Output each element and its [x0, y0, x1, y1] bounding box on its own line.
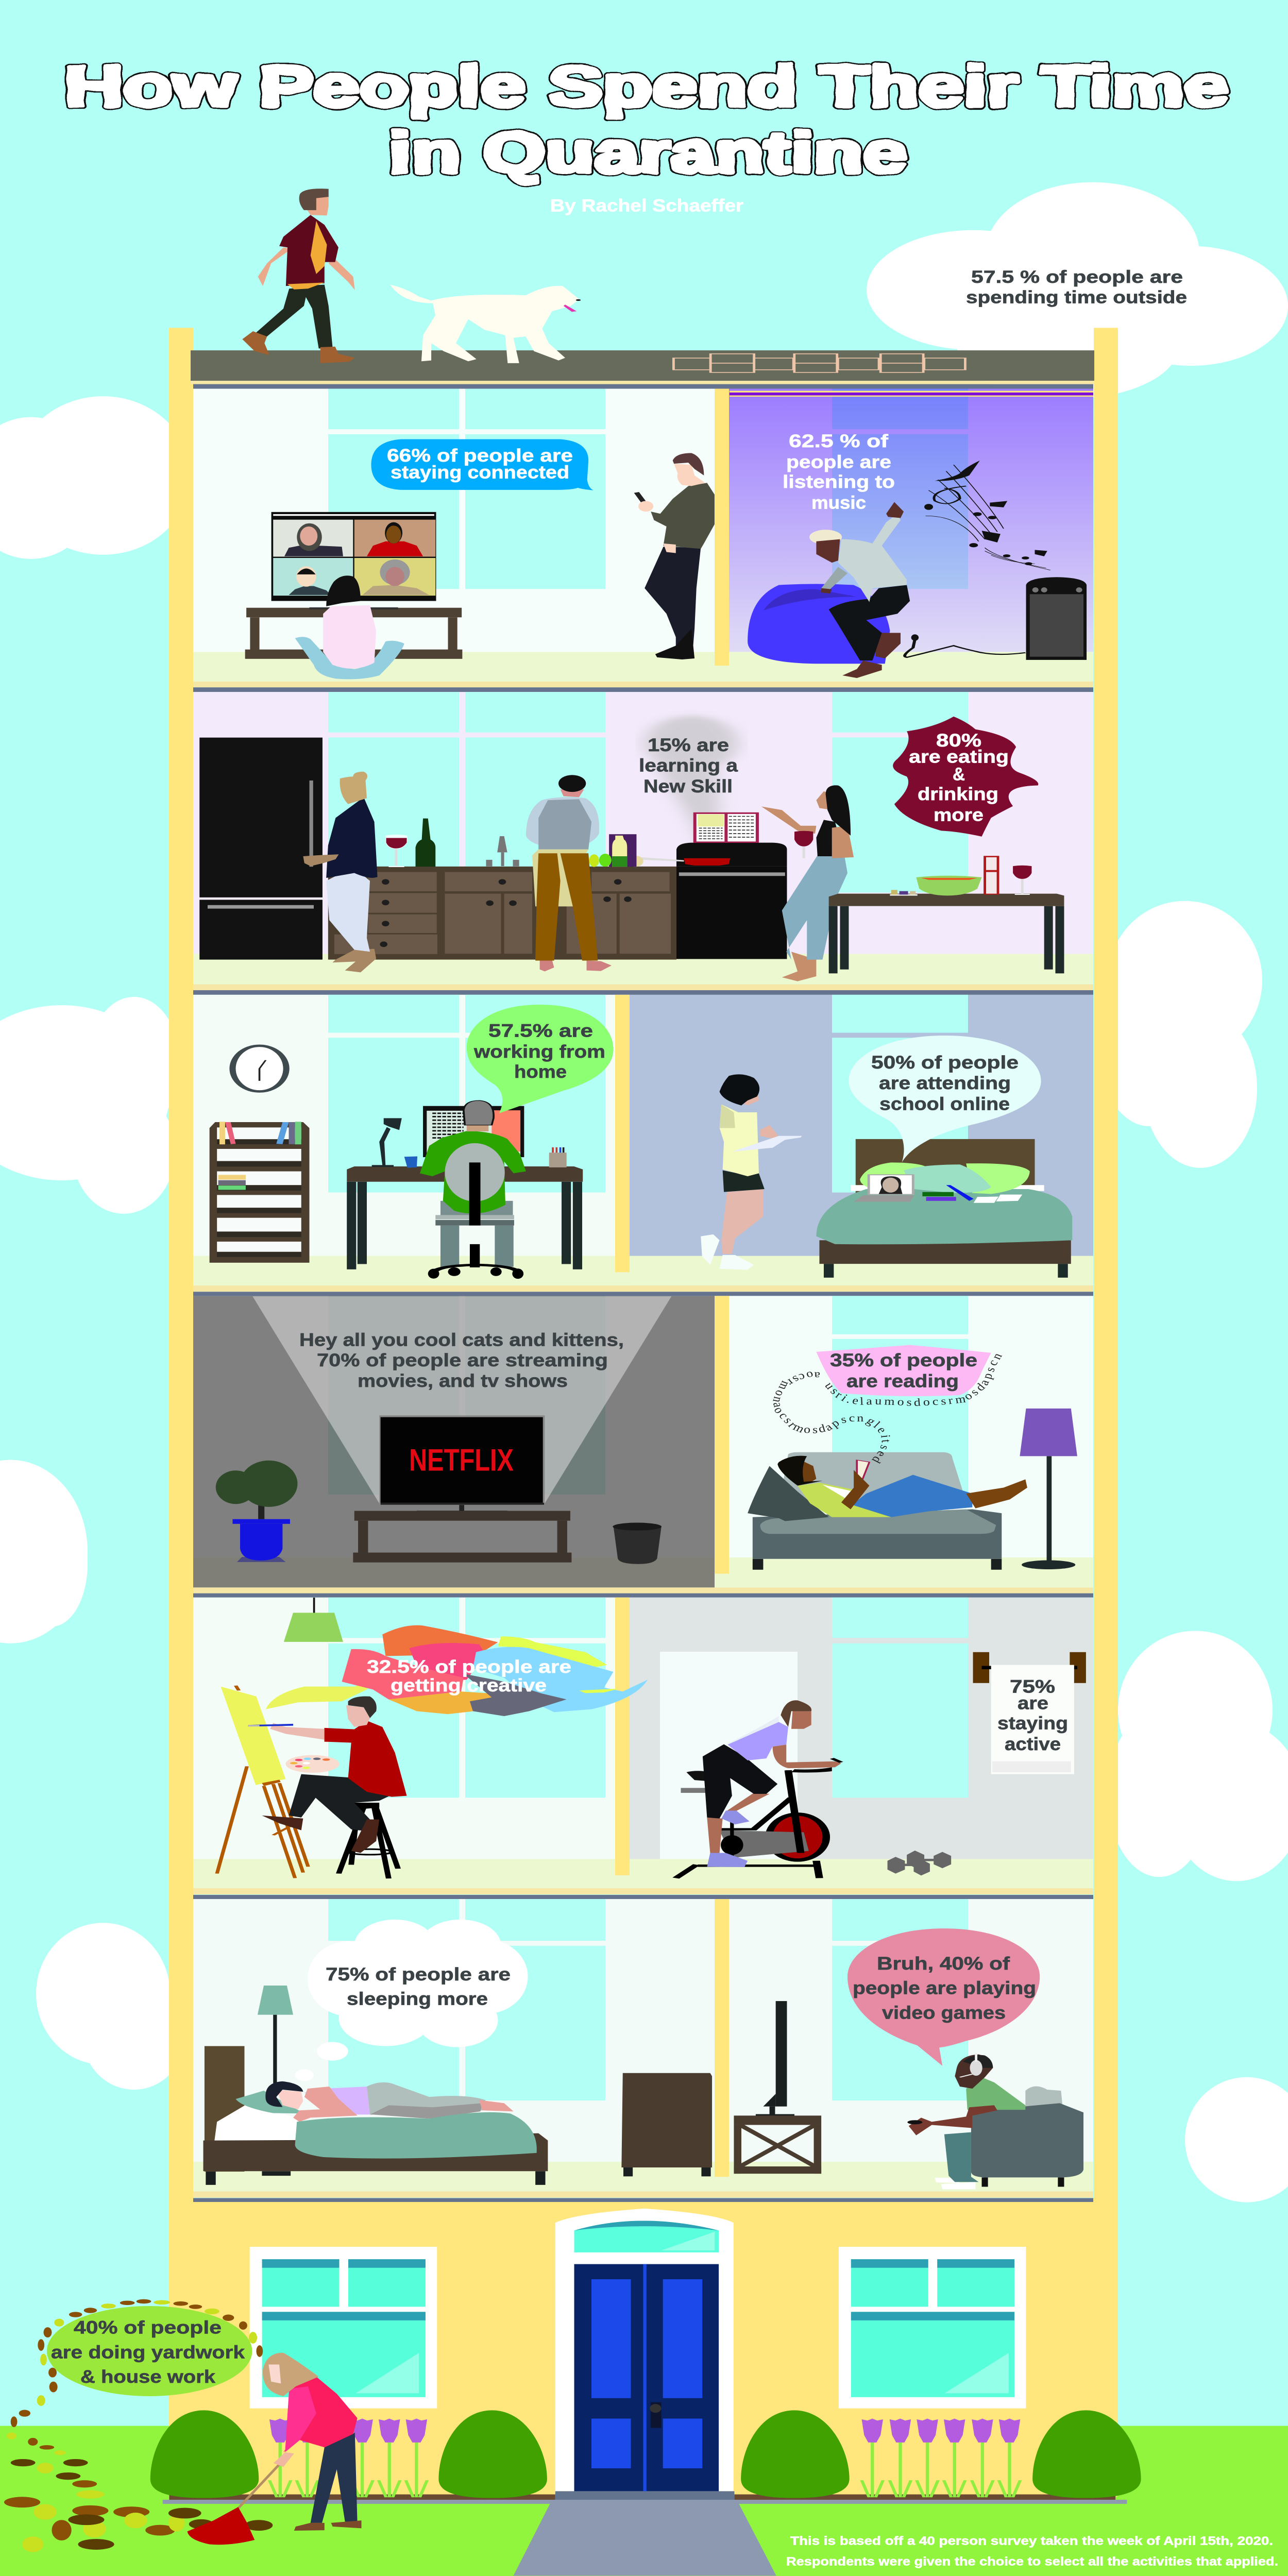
speech bubble: video games: people are playing	[853, 1978, 1036, 1998]
floor 5: creative and active	[193, 1598, 1093, 1899]
girl sitting	[295, 575, 404, 679]
thought cloud: sleeping more: sleeping more	[347, 1989, 488, 2009]
text: learning a new skill: 15% are	[648, 735, 729, 755]
toilet paper stacks	[673, 354, 965, 372]
shrubs	[150, 2410, 1141, 2498]
beanbag	[748, 584, 890, 664]
speech bubble: working from home: 57.5% are	[488, 1021, 593, 1041]
blob: reading: 35% of people	[830, 1350, 977, 1370]
speech bubble: video games: Bruh, 40% of	[877, 1954, 1010, 1974]
house front	[150, 2202, 1141, 2576]
speaker and cable	[905, 577, 1087, 660]
tv table	[245, 607, 462, 659]
blob: eating and drinking: are eating	[909, 747, 1009, 767]
speech bubble: attending school online	[849, 1036, 1041, 1162]
video call tv	[272, 512, 436, 601]
steam	[645, 716, 738, 850]
dining table	[829, 856, 1064, 973]
text: learning a new skill: New Skill	[643, 776, 733, 796]
stove and pan	[627, 843, 787, 959]
dog	[390, 284, 581, 363]
curved book text: aocsrmonaocsrmosdapscngleitsed	[773, 1371, 890, 1464]
bedside lamp	[258, 1986, 293, 2083]
projector light cone	[252, 1296, 671, 1503]
floor 4: streaming and reading	[193, 1296, 1093, 1598]
text: listening to music: people are	[786, 452, 891, 472]
woman raking	[188, 2353, 362, 2545]
sofa	[748, 1452, 1002, 1570]
desk, monitor and lamp	[347, 1106, 583, 1269]
text: streaming: 70% of people are streaming	[317, 1350, 608, 1370]
text: streaming: movies, and tv shows	[358, 1371, 568, 1391]
speech bubble: working from home: working from	[473, 1042, 605, 1062]
towel: staying active: 75%	[1010, 1676, 1055, 1697]
paint splash callout	[266, 1625, 648, 1716]
thought cloud: sleeping more	[295, 1920, 528, 2081]
tv stand	[353, 1511, 571, 1563]
text: learning a new skill	[639, 735, 738, 796]
text: streaming	[299, 1330, 624, 1391]
cook	[526, 775, 612, 972]
netflix tv: NETFLIX	[409, 1443, 514, 1478]
netflix tv	[379, 1415, 545, 1513]
callout: spending time outside cloud: 57.5 % of people are	[971, 267, 1183, 287]
text: learning a new skill: learning a	[639, 756, 738, 776]
callout: yardwork	[47, 2306, 252, 2396]
floor lamp	[1020, 1409, 1077, 1569]
countertop items	[385, 819, 636, 867]
right window	[839, 2247, 1026, 2409]
painter	[248, 1696, 407, 1853]
roof	[191, 350, 1094, 389]
title: in Quarantine	[389, 120, 907, 184]
paint splash callout: 32.5% of people are	[367, 1657, 571, 1677]
cabinets	[328, 867, 676, 960]
callout: yardwork: are doing yardwork	[51, 2342, 245, 2362]
worker in chair	[420, 1100, 526, 1279]
dumbbells	[888, 1851, 951, 1875]
speech bubble: working from home	[467, 1005, 614, 1113]
floor 3: office and school	[193, 995, 1093, 1296]
exercise bike and rider	[676, 1700, 841, 1878]
woman with wine	[761, 785, 854, 981]
woman at fridge	[303, 772, 378, 972]
paint splash callout: getting creative	[391, 1675, 547, 1696]
byline: By Rachel Schaeffer	[550, 196, 743, 215]
speech bubble: staying connected	[371, 439, 594, 490]
speech bubble: staying connected: staying connected	[391, 462, 569, 483]
front door	[555, 2209, 734, 2500]
waste bin	[613, 1522, 662, 1564]
curved book text: usri.elaumosdocsrmosdapscn	[825, 1354, 1003, 1406]
survey footnote	[786, 2534, 1278, 2568]
easel	[217, 1686, 308, 1878]
towel: staying active	[973, 1652, 1086, 1774]
towel: staying active: staying	[997, 1713, 1068, 1734]
floor 6: sleeping and gaming	[193, 1899, 1093, 2202]
blob: reading: are reading	[846, 1371, 959, 1392]
text: listening to music	[783, 431, 895, 513]
floor 1: connecting and music	[193, 389, 1093, 692]
text: listening to music: music	[811, 493, 866, 513]
text: listening to music: 62.5 % of	[789, 431, 889, 451]
person reading	[777, 1456, 1027, 1517]
music notes	[924, 461, 1050, 570]
callout: spending time outside cloud: spending time outside	[966, 287, 1187, 308]
speech bubble: video games: video games	[882, 2003, 1006, 2023]
blob: eating and drinking: &	[953, 765, 965, 785]
survey footnote: This is based off a 40 person survey taken the week of April 15th, 2020.	[790, 2534, 1273, 2548]
cookbook	[693, 812, 759, 843]
title: in Quarantine	[389, 120, 907, 184]
bed with laptop	[816, 1139, 1072, 1278]
building posts	[169, 328, 1118, 2503]
towel: staying active: active	[1005, 1734, 1061, 1754]
background clouds	[0, 396, 1288, 2202]
man with phone	[634, 453, 715, 659]
blob: eating and drinking: more	[934, 805, 984, 825]
stool	[338, 1803, 398, 1878]
fridge	[199, 738, 323, 960]
towel: staying active: are	[1018, 1693, 1048, 1714]
title: How People Spend Their Time	[65, 54, 1229, 118]
dresser	[621, 2073, 712, 2176]
left window	[250, 2247, 437, 2409]
title: How People Spend Their Time	[65, 54, 1229, 118]
falling leaves	[4, 2299, 273, 2552]
speech bubble: attending school online: are attending	[879, 1073, 1011, 1093]
text: listening to music: listening to	[783, 472, 895, 492]
pendant lamp	[284, 1598, 343, 1642]
title	[65, 54, 1229, 184]
blob: reading	[816, 1345, 991, 1396]
blob: eating and drinking: 80%	[936, 731, 981, 751]
potted plant	[216, 1461, 297, 1562]
blob: eating and drinking	[893, 717, 1038, 837]
callout: yardwork: & house work	[80, 2367, 216, 2387]
speech bubble: working from home: home	[514, 1062, 567, 1082]
blob: eating and drinking: drinking	[918, 784, 998, 804]
callout: yardwork: 40% of people	[74, 2317, 222, 2338]
gamer in armchair	[907, 2054, 1083, 2189]
speech bubble: video games	[848, 1928, 1040, 2066]
bookshelf	[210, 1122, 310, 1263]
speech bubble: attending school online: school online	[879, 1094, 1010, 1114]
callout: spending time outside cloud	[867, 182, 1288, 399]
dancer	[809, 502, 910, 678]
bed with sleeper	[204, 2046, 548, 2185]
flower bed and path	[163, 2495, 1127, 2576]
clock	[229, 1045, 290, 1093]
floor 2: kitchen	[193, 692, 1093, 995]
speech bubble: attending school online: 50% of people	[871, 1053, 1019, 1073]
thought cloud: sleeping more: 75% of people are	[326, 1964, 511, 1985]
tulips	[269, 2418, 1020, 2497]
student standing	[701, 1074, 802, 1270]
lawn	[0, 2426, 1288, 2576]
side table and tv	[734, 2001, 821, 2174]
man walking	[242, 189, 355, 363]
text: streaming: Hey all you cool cats and kittens,	[299, 1330, 624, 1350]
curved book text	[773, 1354, 1003, 1464]
speech bubble: staying connected: 66% of people are	[387, 446, 573, 466]
